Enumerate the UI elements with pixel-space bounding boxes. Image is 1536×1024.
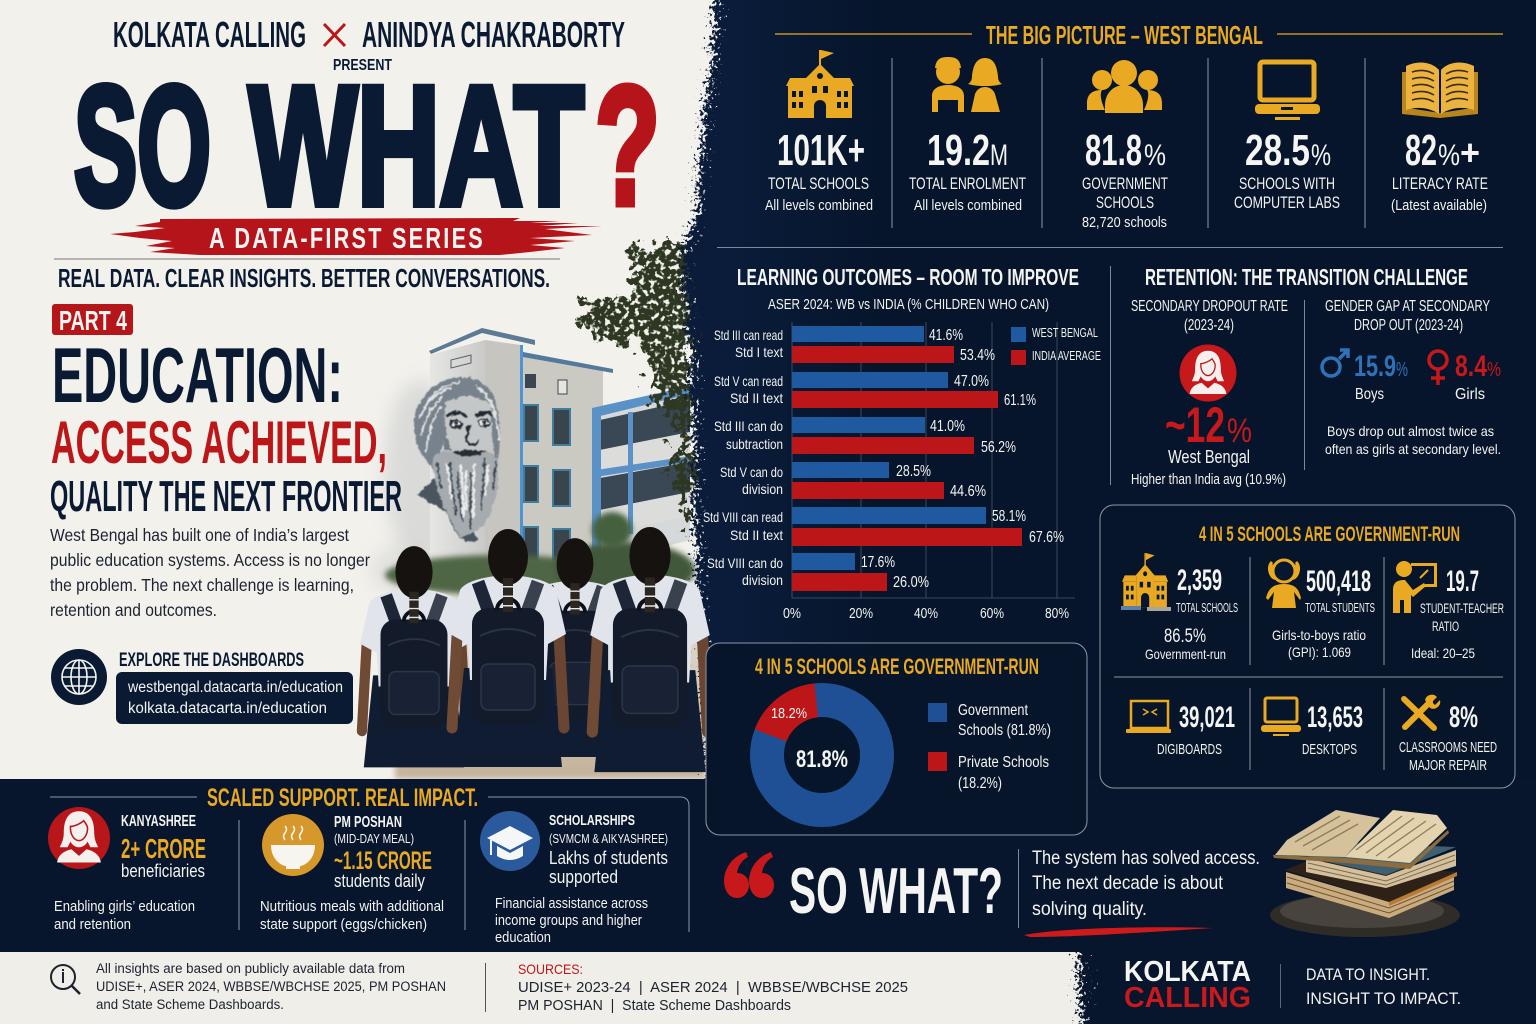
stat: government schools: SCHOOLS: [1096, 193, 1154, 212]
footer: data note: and State Scheme Dashboards.: [96, 997, 284, 1012]
heading: big picture: THE BIG PICTURE – WEST BENGAL: [986, 20, 1263, 50]
stat: total schools: TOTAL SCHOOLS: [768, 174, 869, 193]
stat: total schools: 2,359: [1177, 564, 1222, 597]
stat: total students: TOTAL STUDENTS: [1305, 601, 1375, 615]
bar chart: WB vs India: Std VIII can read: [703, 509, 783, 525]
heading: education: [50, 331, 402, 521]
item: Kanyashree: 2+ CRORE: [121, 833, 206, 864]
stat: gender gap: [1322, 298, 1501, 457]
stat: total schools: All levels combined: [765, 197, 873, 214]
footer: sources: SOURCES:: [518, 961, 583, 977]
bar chart: WB vs India: 41.6%: [929, 327, 963, 344]
callout: so what conclusion: [724, 847, 1260, 937]
icon: school: [786, 50, 854, 118]
legend: chart: [1011, 326, 1101, 365]
callout: so what conclusion: The system has solved access.: [1032, 847, 1260, 869]
stat: total enrolment: M: [990, 139, 1008, 172]
item: Kanyashree: beneficiaries: [121, 861, 205, 881]
stat: student-teacher ratio: [1393, 561, 1504, 661]
bar chart: WB vs India: subtraction: [726, 436, 783, 452]
bar chart: WB vs India: division: [742, 572, 783, 588]
bar chart: WB vs India: Std I text: [735, 344, 783, 360]
stat: total schools: [765, 50, 873, 214]
item: PM Poshan: (MID-DAY MEAL): [334, 832, 414, 846]
brand line: Kolkata Calling x Anindya Chakraborty: KOLKATA CALLING: [113, 14, 306, 55]
bar chart: WB vs India: Std V can do: [720, 464, 783, 480]
stat: government schools: [1082, 60, 1168, 231]
item: scholarships: [480, 811, 668, 946]
panel solid core without speckle holes: [696, 0, 1536, 780]
footer: sources: PM POSHAN | State Scheme Dashboards: [518, 998, 791, 1014]
text block: intro paragraph: retention and outcomes.: [50, 600, 217, 620]
item: Kanyashree: Enabling girls’ education: [54, 898, 195, 915]
bar chart: WB vs India: 80%: [1045, 606, 1069, 622]
icon: info magnifier: [51, 965, 80, 994]
item: scholarships: income groups and higher: [495, 912, 642, 929]
item: scholarships: Financial assistance across: [495, 895, 648, 912]
text block: intro paragraph: West Bengal has built one of India’s largest: [50, 525, 349, 545]
footer: tagline: DATA TO INSIGHT.: [1306, 966, 1430, 984]
bar chart: WB vs India: 47.0%: [954, 373, 989, 390]
item: PM Poshan: Nutritious meals with additional: [260, 898, 444, 915]
panel: district snapshot: [1100, 505, 1515, 788]
stat: classrooms need repair: 8%: [1449, 701, 1478, 734]
stat: total schools: Government-run: [1145, 646, 1226, 662]
stat: government schools: 81.8: [1085, 126, 1142, 175]
item: PM Poshan: ~1.15 CRORE: [334, 847, 432, 875]
legend: chart: WEST BENGAL: [1032, 326, 1098, 340]
footer: data note: All insights are based on publicly available data from: [96, 961, 405, 976]
illustration: four students seen from behind: [360, 527, 710, 772]
donut chart: [767, 700, 877, 810]
item: Kanyashree: and retention: [54, 916, 131, 933]
footer: tagline: INSIGHT TO IMPACT.: [1306, 990, 1461, 1008]
item: scholarships: supported: [549, 867, 618, 887]
stat: secondary dropout rate: Higher than India avg (10.9%): [1131, 472, 1286, 488]
stat: secondary dropout rate: West Bengal: [1168, 447, 1250, 467]
stat: literacy rate: (Latest available): [1391, 197, 1487, 214]
legend: donut: Private Schools: [958, 754, 1049, 771]
footer: sources: [518, 961, 908, 1014]
title: So What?: WHAT: [249, 51, 584, 240]
legend: donut: (18.2%): [958, 775, 1002, 792]
stat: desktops: DESKTOPS: [1302, 741, 1357, 758]
tagline: REAL DATA. CLEAR INSIGHTS. BETTER CONVERSATIONS.: [58, 263, 550, 293]
item: scholarships: education: [495, 929, 551, 946]
legend: chart: INDIA AVERAGE: [1032, 349, 1101, 363]
stat: computer labs: 28.5: [1245, 126, 1310, 175]
stat: student-teacher ratio: RATIO: [1432, 619, 1459, 634]
illustration: school building: [370, 328, 690, 596]
illustration: stack of books on pedestal: [1270, 810, 1460, 937]
stat: student-teacher ratio: 19.7: [1446, 565, 1479, 598]
illustration: sketched portrait mural: [414, 377, 500, 542]
stat: digiboards: 39,021: [1179, 701, 1235, 734]
panel: government-run donut: [706, 643, 1087, 835]
stat: total schools: TOTAL SCHOOLS: [1176, 601, 1238, 615]
brand line: Kolkata Calling x Anindya Chakraborty: [113, 14, 625, 55]
bar chart: WB vs India: 44.6%: [950, 483, 986, 500]
icon: male symbol: [1339, 350, 1348, 359]
item: scholarships: (SVMCM & AIKYASHREE): [549, 832, 668, 846]
text block: intro paragraph: public education systems. Access is no longer: [50, 550, 370, 570]
stat: gender gap: Boys: [1355, 386, 1384, 403]
banner: a data-first series: A DATA-FIRST SERIES: [209, 223, 485, 255]
stat: digiboards: [1126, 701, 1235, 758]
stat: desktops: [1261, 698, 1363, 758]
bar chart: WB vs India: Std VIII can do: [707, 555, 783, 571]
panel shading on right side: [730, 0, 1536, 779]
stat: computer labs: %: [1311, 139, 1331, 172]
stat: desktops: 13,653: [1307, 701, 1363, 734]
stat: gender gap: %: [1487, 359, 1501, 381]
stat: gender gap: Girls: [1455, 386, 1485, 403]
stat: total students: 500,418: [1306, 565, 1371, 598]
stat: literacy rate: %: [1438, 139, 1460, 172]
stat: secondary dropout rate: (2023-24): [1184, 317, 1234, 334]
item: Kanyashree: [48, 807, 206, 933]
bar chart: WB vs India: 53.4%: [960, 347, 995, 364]
icon: quotation mark: [724, 852, 774, 898]
callout: so what conclusion: The next decade is about: [1032, 872, 1223, 894]
stat: government schools: %: [1144, 139, 1166, 172]
item: scholarships: SCHOLARSHIPS: [549, 812, 635, 829]
stat: computer labs: [1234, 62, 1340, 212]
icon: people group: [1087, 60, 1162, 113]
callout: explore the dashboards: kolkata.datacarta.in/education: [128, 700, 327, 717]
bar chart: WB vs India: 0%: [783, 606, 801, 622]
band: scaled support background: [0, 779, 1536, 952]
title: So What?: ?: [595, 51, 660, 240]
band: footer dark solid: [1098, 940, 1536, 1024]
stat: total schools: 101K+: [777, 126, 865, 175]
heading: education: QUALITY THE NEXT FRONTIER: [50, 472, 402, 521]
text block: intro paragraph: the problem. The next challenge is learning,: [50, 575, 354, 595]
bar chart: WB vs India: 28.5%: [896, 463, 931, 480]
stat: student-teacher ratio: Ideal: 20–25: [1411, 645, 1475, 661]
callout: so what conclusion: solving quality.: [1032, 898, 1147, 920]
illustration: tree foliage: [582, 240, 702, 530]
donut chart: 81.8%: [796, 746, 848, 773]
bar chart: WB vs India: 60%: [980, 606, 1004, 622]
item: PM Poshan: PM POSHAN: [334, 814, 402, 831]
donut chart: 18.2%: [771, 706, 807, 722]
bar chart: WB vs India: [703, 322, 1075, 622]
item: PM Poshan: students daily: [334, 871, 425, 891]
callout: so what conclusion: SO WHAT?: [789, 854, 1003, 927]
panel: dark navy right side with torn edge: [680, 0, 1536, 820]
item: PM Poshan: state support (eggs/chicken): [260, 916, 427, 933]
bar chart: WB vs India: Std V can read: [714, 373, 783, 389]
brand line: Kolkata Calling x Anindya Chakraborty: ANINDYA CHAKRABORTY: [362, 14, 625, 55]
footer: Kolkata Calling logo: CALLING: [1124, 982, 1251, 1014]
footer: Kolkata Calling logo: KOLKATA: [1124, 956, 1251, 988]
stat: literacy rate: LITERACY RATE: [1392, 174, 1488, 193]
bar chart: WB vs India: division: [742, 481, 783, 497]
title: So What?: SO: [74, 51, 211, 240]
stat: digiboards: DIGIBOARDS: [1157, 741, 1222, 758]
stat: total students: Girls-to-boys ratio: [1272, 627, 1366, 643]
text block: intro paragraph: [50, 525, 370, 620]
footer: sources: UDISE+ 2023-24 | ASER 2024 | WBBSE/WBCHSE 2025: [518, 980, 908, 996]
stat: government schools: GOVERNMENT: [1082, 174, 1168, 193]
bar chart: WB vs India: 40%: [914, 606, 938, 622]
bar chart: WB vs India: 61.1%: [1004, 392, 1036, 409]
stat: computer labs: COMPUTER LABS: [1234, 193, 1340, 212]
stat: literacy rate: +: [1460, 132, 1480, 173]
panel: scaled support, real impact: [48, 784, 689, 946]
footer: data note: [51, 961, 446, 1012]
heading: education: EDUCATION:: [52, 331, 343, 419]
legend: donut: [928, 702, 1051, 792]
footer: Kolkata Calling logo: [1124, 956, 1251, 1014]
item: Kanyashree: KANYASHREE: [121, 813, 196, 830]
stat: total enrolment: All levels combined: [914, 197, 1022, 214]
icon: boy and girl: [932, 57, 1002, 112]
badge: part 4: [52, 304, 133, 336]
stat: secondary dropout rate: %: [1227, 412, 1252, 450]
stat: total schools: [1121, 553, 1238, 662]
callout: explore the dashboards: westbengal.datacarta.in/education: [127, 679, 343, 696]
stat: secondary dropout rate: [1131, 298, 1288, 488]
stat: gender gap: Boys drop out almost twice as: [1327, 423, 1494, 439]
text: present: PRESENT: [333, 57, 392, 74]
heading: learning outcomes: LEARNING OUTCOMES – ROOM TO IMPROVE: [737, 264, 1079, 290]
stat: gender gap: often as girls at secondary level.: [1325, 441, 1501, 457]
stat: gender gap: 8.4: [1455, 350, 1487, 383]
callout: explore the dashboards: EXPLORE THE DASHBOARDS: [119, 649, 304, 671]
heading: education: ACCESS ACHIEVED,: [51, 409, 387, 476]
stat: total enrolment: TOTAL ENROLMENT: [909, 174, 1026, 193]
stat: classrooms need repair: [1399, 695, 1497, 774]
stat: secondary dropout rate: SECONDARY DROPOUT RATE: [1131, 298, 1288, 315]
bar chart: WB vs India: Std III can do: [714, 418, 783, 434]
callout: explore the dashboards: [116, 649, 353, 724]
stat: total students: (GPI): 1.069: [1288, 644, 1351, 660]
bar chart: WB vs India: Std II text: [730, 527, 783, 543]
title: So What?: [74, 51, 660, 240]
panel: the big picture: [765, 20, 1503, 231]
bar chart: WB vs India: 20%: [849, 606, 873, 622]
stat: total students: [1266, 560, 1375, 660]
bar chart: WB vs India: 67.6%: [1029, 529, 1064, 546]
stat: total enrolment: [909, 57, 1026, 214]
stat: literacy rate: 82: [1405, 126, 1437, 175]
bar chart: WB vs India: Std II text: [730, 390, 783, 406]
bar chart: WB vs India: 58.1%: [992, 508, 1026, 525]
stat: literacy rate: [1391, 63, 1488, 214]
stat: secondary dropout rate: ~12: [1165, 397, 1225, 453]
legend: donut: Government: [958, 702, 1029, 719]
stat: gender gap: DROP OUT (2023-24): [1354, 317, 1463, 334]
stat: government schools: 82,720 schools: [1082, 214, 1167, 231]
band: footer dark torn end: [1076, 930, 1536, 1024]
heading: donut panel: 4 IN 5 SCHOOLS ARE GOVERNMENT-RUN: [755, 654, 1039, 679]
icon: female symbol: [1431, 369, 1445, 385]
hedge and ground behind students: [385, 512, 705, 779]
band: footer cream strip: [0, 952, 1100, 1024]
bar chart: WB vs India: Std III can read: [714, 327, 783, 343]
stat: total schools: 86.5%: [1164, 626, 1206, 647]
bar chart: WB vs India: 26.0%: [893, 574, 929, 591]
icon: open book: [1402, 63, 1478, 118]
stat: gender gap: 15.9: [1354, 350, 1396, 383]
bar chart: WB vs India: 56.2%: [981, 439, 1016, 456]
stat: total enrolment: 19.2: [927, 126, 990, 175]
stat: gender gap: %: [1396, 359, 1408, 381]
legend: donut: Schools (81.8%): [958, 722, 1051, 739]
heading: scaled support: SCALED SUPPORT. REAL IMPACT.: [207, 784, 478, 812]
footer: tagline: [1306, 966, 1461, 1008]
footer: data note: UDISE+, ASER 2024, WBBSE/WBCHSE 2025, PM POSHAN: [96, 979, 446, 994]
subheading: ASER 2024: ASER 2024: WB vs INDIA (% CHILDREN WHO CAN): [768, 296, 1049, 313]
item: scholarships: Lakhs of students: [549, 848, 668, 868]
icon: globe: [51, 649, 107, 705]
stat: classrooms need repair: MAJOR REPAIR: [1409, 758, 1487, 774]
panel: retention: [1131, 264, 1501, 488]
panel: learning outcomes: [703, 264, 1101, 622]
banner: a data-first series: [110, 218, 602, 255]
icon: computer: [1255, 62, 1320, 120]
bar chart: WB vs India: 41.0%: [930, 418, 965, 435]
badge: part 4: PART 4: [59, 305, 127, 336]
stat: computer labs: SCHOOLS WITH: [1239, 174, 1335, 193]
bar chart: WB vs India: 17.6%: [861, 554, 895, 571]
item: PM Poshan: [260, 814, 444, 933]
